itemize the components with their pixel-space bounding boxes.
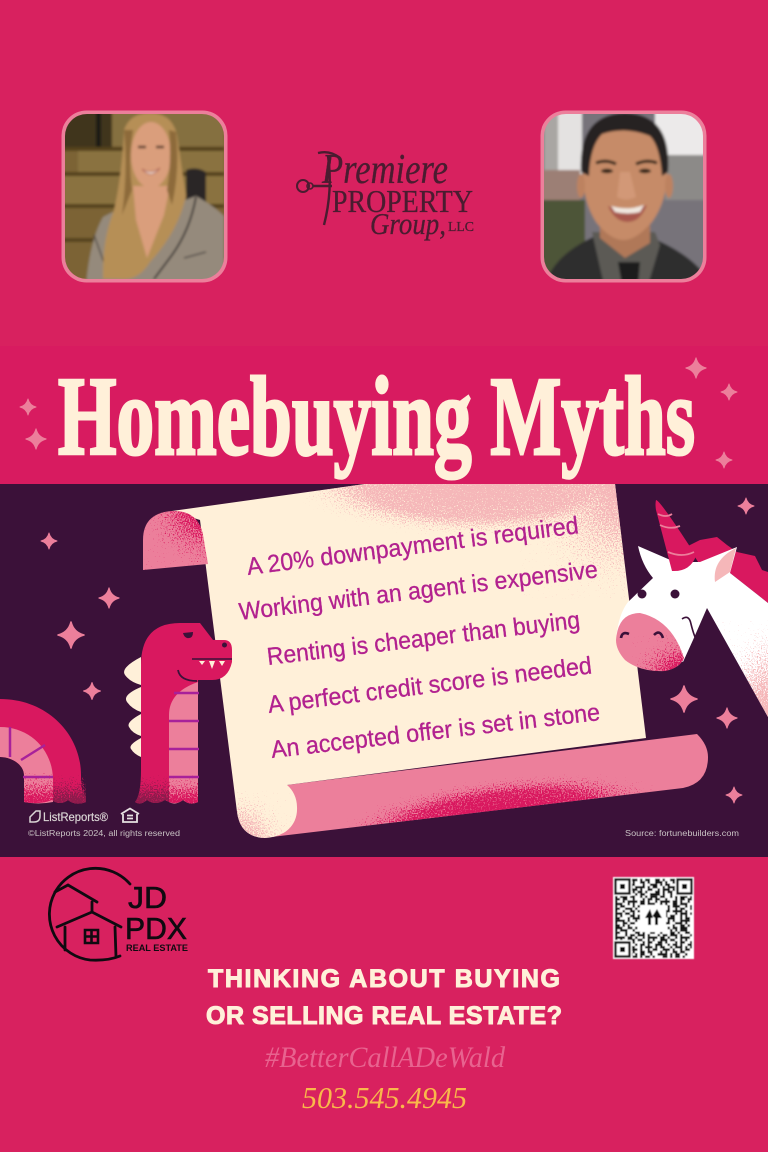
- logo: Premiere Property Group: Group,: [370, 206, 446, 241]
- panel sparkles: [41, 498, 754, 803]
- scroll text: myths list: An accepted offer is set in stone: [270, 699, 601, 764]
- icon: house in circle: [49, 868, 130, 960]
- logo: Premiere Property Group: [297, 147, 474, 241]
- logo: Premiere Property Group: Premiere: [321, 147, 448, 193]
- logo: JD PDX Real Estate: PDX: [125, 911, 187, 946]
- panel: dark illustration: [0, 484, 768, 857]
- scroll text: myths list: A 20% downpayment is required: [245, 512, 580, 581]
- key icon: [297, 152, 340, 225]
- nose: [616, 613, 684, 671]
- logo: Premiere Property Group: PROPERTY: [332, 183, 473, 219]
- hashtag: #BetterCallADeWald: [265, 1041, 506, 1074]
- ListReports brand: ListReports®: [43, 810, 108, 824]
- logo: JD PDX Real Estate: [49, 868, 188, 960]
- scroll text: myths list: Working with an agent is expensive: [238, 556, 599, 626]
- finder patterns: [616, 880, 692, 956]
- dinosaur arch: [0, 699, 86, 805]
- source: Source: fortunebuilders.com: [625, 828, 739, 838]
- logo: JD PDX Real Estate: REAL ESTATE: [126, 943, 188, 953]
- logo: JD PDX Real Estate: JD: [128, 880, 167, 915]
- title sparkles: [20, 358, 737, 468]
- QR code: [613, 877, 694, 959]
- horn: [656, 500, 696, 571]
- phone number: 503.545.4945: [302, 1080, 467, 1115]
- call to action heading: OR SELLING REAL ESTATE?: [206, 1002, 562, 1030]
- copyright: ©ListReports 2024, all rights reserved: [28, 828, 180, 838]
- scroll text: myths list: [238, 512, 601, 764]
- call to action heading: THINKING ABOUT BUYING: [208, 965, 560, 993]
- spikes: [124, 657, 141, 757]
- photo: man agent: [540, 110, 710, 285]
- unicorn: [616, 500, 768, 717]
- call to action heading: [206, 965, 562, 1030]
- icon: ListReports mark: [30, 811, 40, 822]
- scroll: [143, 484, 708, 840]
- logo: Premiere Property Group: LLC: [448, 220, 474, 235]
- face details: [183, 632, 193, 638]
- icon: equal housing: [121, 808, 139, 822]
- eyes, nostrils, smile: [638, 590, 646, 598]
- QR centre logo: [640, 905, 666, 932]
- photo: woman agent: [60, 110, 230, 285]
- scroll text: myths list: A perfect credit score is needed: [266, 652, 593, 719]
- title band: [0, 346, 768, 484]
- scroll text: myths list: Renting is cheaper than buying: [266, 607, 581, 671]
- dinosaur: [124, 623, 232, 805]
